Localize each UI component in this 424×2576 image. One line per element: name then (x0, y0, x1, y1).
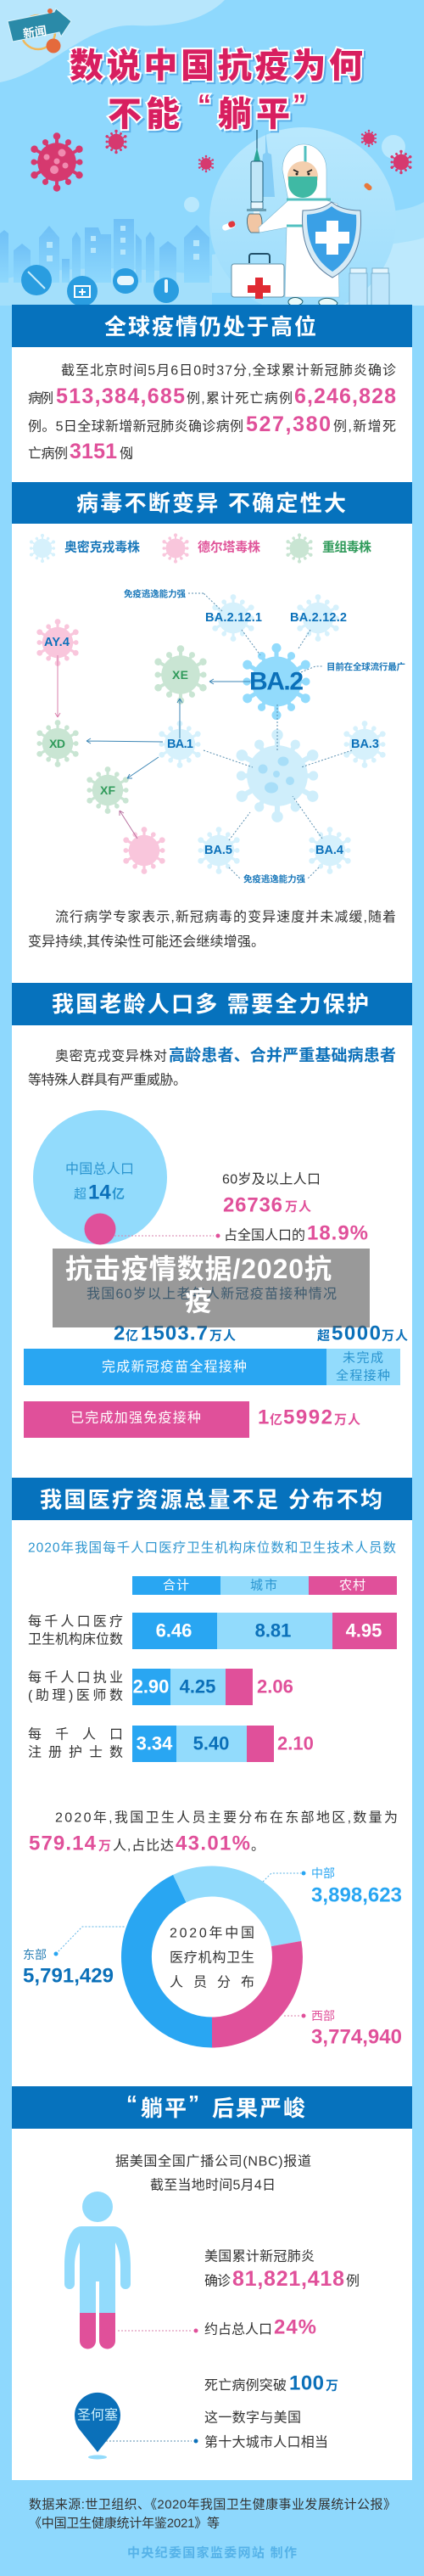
row: doctors: (助理)医师数 (28, 1687, 123, 1703)
section 5 heading: 后果严峻 (212, 2096, 305, 2121)
row: beds: 每千人口医疗 (28, 1614, 123, 1630)
text: personnel distribution (29, 1810, 398, 1855)
row: doctors (28, 1669, 293, 1705)
section 3 heading (12, 983, 412, 1025)
text: intro (28, 1046, 396, 1088)
bar: full vaccination: 全程接种 (336, 1368, 390, 1383)
text: personnel distribution: 43.01% (176, 1832, 250, 1855)
title: 不能 (108, 96, 180, 133)
row: beds (28, 1613, 397, 1649)
text: intro: 奥密克戎变异株对 (55, 1049, 167, 1064)
row: nurses: 5.40 (193, 1733, 229, 1754)
variant labels: BA.2 (249, 667, 304, 696)
chart: population circle: 中国总人口 (65, 1161, 134, 1176)
icon: map pin San Jose (75, 2393, 120, 2460)
overlay banner: 疫 (185, 1286, 212, 1316)
text: NBC intro: 截至当地时间5月4日 (150, 2178, 276, 2193)
title: 数说中国抗疫为何 (70, 48, 363, 85)
row: doctors: 4.25 (180, 1675, 215, 1698)
label: east: 东部 (23, 1948, 47, 1961)
legend (29, 533, 371, 564)
stat labels: vaccination: 1503.7 (141, 1322, 208, 1344)
stat: over 60: 60岁及以上人口 (222, 1171, 321, 1187)
panel: medical resources (12, 1520, 412, 2086)
text: personnel distribution: 2020年,我国卫生人员主要分布在东部地区,数量为 (55, 1810, 398, 1825)
stat: US cases (118, 2249, 360, 2339)
badge: news (8, 8, 71, 53)
syringe (247, 130, 266, 233)
donut centre label: 人员分布 (170, 1974, 254, 1990)
variant labels: BA.2.12.2 (290, 611, 347, 625)
bar: booster: 1 (258, 1406, 269, 1429)
row: doctors: 2.06 (257, 1675, 293, 1698)
variant labels: XF (100, 783, 115, 797)
text: global figures: 亡病例 (28, 446, 68, 462)
round icons (21, 265, 179, 306)
stat: US cases: 例 (346, 2273, 360, 2288)
stat: US deaths: 这一数字与美国 (204, 2410, 301, 2426)
row: doctors: 2.90 (133, 1675, 169, 1698)
label: west: 3,774,940 (311, 2025, 402, 2049)
row: nurses: 3.34 (137, 1733, 173, 1754)
stat: US deaths: 万 (326, 2378, 338, 2394)
section 4 heading (12, 1478, 412, 1520)
row: doctors: 每千人口执业 (28, 1670, 123, 1686)
text: mutation note: 流行病学专家表示,新冠病毒的变异速度并未减缓,随着 (55, 910, 396, 925)
stat: US deaths: 第十大城市人口相当 (204, 2434, 328, 2450)
table header: 城市 (250, 1579, 277, 1592)
stat: over 60 (114, 1171, 368, 1244)
text: NBC intro (115, 2154, 311, 2193)
bar: booster (24, 1401, 360, 1438)
row: beds: 4.95 (346, 1619, 382, 1642)
footer: sources (29, 2497, 396, 2531)
bar: booster: 亿 (270, 1412, 282, 1428)
stat labels: vaccination: 万人 (209, 1329, 236, 1343)
solid arrows (55, 655, 250, 839)
table header: 农村 (339, 1579, 365, 1592)
icon: map pin San Jose: 圣何塞 (77, 2407, 118, 2422)
variant labels: XD (49, 737, 65, 750)
text: global figures: 513,384,685 (56, 384, 185, 408)
donut centre label (170, 1925, 254, 1990)
row: nurses: 2.10 (277, 1733, 314, 1754)
chart: population circle: 亿 (112, 1187, 125, 1202)
label: central: 中部 (311, 1866, 335, 1880)
hero illustration (0, 0, 424, 314)
variant labels: 目前在全球流行最广 (326, 661, 405, 672)
bar: full vaccination: 未完成 (343, 1351, 383, 1365)
stat: US deaths: 死亡病例突破 (204, 2378, 287, 2394)
stat: US cases: 美国累计新冠肺炎 (204, 2249, 315, 2265)
text: intro: 等特殊人群具有严重威胁。 (28, 1073, 187, 1088)
icon: person (64, 2192, 131, 2349)
row: beds: 8.81 (255, 1619, 291, 1642)
stat labels: vaccination: 2 (114, 1322, 125, 1344)
row: beds: 6.46 (156, 1619, 192, 1642)
footer: sources: 数据来源:世卫组织、《2020年我国卫生健康事业发展统计公报》 (29, 2497, 396, 2512)
stat: US cases: 约占总人口 (204, 2322, 272, 2337)
tower (259, 132, 275, 197)
text: personnel distribution: 。 (251, 1838, 265, 1854)
stat: over 60: 18.9% (307, 1222, 368, 1244)
text: personnel distribution: 579.14 (29, 1832, 97, 1855)
section 2 heading (12, 482, 412, 524)
section 5 heading (12, 2086, 412, 2129)
badge: news: 新闻 (22, 24, 47, 41)
text: global figures: 例,累计死亡病例 (187, 390, 293, 406)
stat labels: vaccination: 亿 (126, 1329, 138, 1343)
variant labels: AY.4 (44, 636, 70, 649)
table header (132, 1576, 397, 1595)
stat: over 60: 26736 (223, 1193, 282, 1217)
stat: over 60: 占全国人口的 (224, 1227, 305, 1243)
panel: variants (12, 524, 412, 983)
title (70, 48, 363, 133)
text: global figures: 病例 (28, 390, 53, 406)
stat: US deaths: 100 (289, 2371, 324, 2395)
panel: consequences (12, 2129, 412, 2480)
row: nurses: 注册护士数 (28, 1745, 123, 1760)
section 3 heading: 我国老龄人口多 需要全力保护 (52, 991, 369, 1017)
chart title: 2020年我国每千人口医疗卫生机构床位数和卫生技术人员数 (28, 1540, 396, 1555)
text: global figures (28, 363, 396, 463)
variant labels (44, 588, 405, 884)
text: NBC intro: 据美国全国广播公司(NBC)报道 (115, 2154, 311, 2169)
row: beds: 卫生机构床位数 (28, 1631, 123, 1647)
chart heading: vaccination: 我国60岁以上老年人新冠疫苗接种情况 (86, 1287, 337, 1302)
label: west (284, 2009, 402, 2049)
variant labels: BA.1 (167, 738, 193, 751)
section 5 heading: “ (126, 2091, 137, 2116)
doctor (259, 144, 339, 307)
text: mutation note (28, 910, 396, 949)
stat labels: vaccination: 5000 (332, 1322, 381, 1344)
title: ” (293, 89, 306, 120)
legend: 奥密克戎毒株 (64, 540, 140, 555)
label: central: 3,898,623 (311, 1884, 402, 1906)
stat labels: vaccination: 万人 (382, 1329, 408, 1343)
title: “ (198, 89, 211, 120)
chart: population circle: 超 (74, 1187, 86, 1202)
stat: US cases: 确诊 (204, 2273, 231, 2288)
shield (303, 202, 361, 278)
legend: 德尔塔毒株 (198, 540, 260, 555)
label: west: 西部 (311, 2009, 335, 2023)
variant labels: XE (172, 668, 188, 682)
stat: US deaths (106, 2371, 338, 2450)
stat labels: vaccination (114, 1322, 408, 1344)
bar: full vaccination (24, 1349, 400, 1385)
stat labels: vaccination: 超 (317, 1327, 330, 1343)
variant labels: BA.2.12.1 (205, 611, 262, 625)
row: nurses: 每千人口 (28, 1726, 123, 1742)
text: global figures: 3151 (70, 440, 117, 463)
text: intro: 高龄患者、合并严重基础病患者 (169, 1046, 396, 1064)
overlay banner: 抗击疫情数据/2020抗 (65, 1254, 332, 1284)
row: nurses (28, 1726, 314, 1762)
label: east (23, 1927, 126, 1988)
text: mutation note: 变异持续,其传染性可能还会继续增强。 (28, 934, 265, 949)
section 1 heading: 全球疫情仍处于高位 (104, 314, 316, 340)
big bubble behind doctor (209, 127, 396, 314)
capsules (221, 182, 373, 232)
donut centre label: 医疗机构卫生 (170, 1950, 254, 1966)
text: global figures: 527,380 (246, 412, 331, 436)
stat: US cases: 81,821,418 (232, 2267, 344, 2291)
chart: population circle (33, 1110, 167, 1244)
text: global figures: 例,新增死 (333, 419, 396, 435)
text: global figures: 6,246,828 (294, 384, 396, 408)
legend: 重组毒株 (322, 540, 371, 555)
section 5 heading: 躺平 (141, 2096, 187, 2121)
text: global figures: 例。5日全球新增新冠肺炎确诊病例 (28, 419, 243, 435)
city skyline (0, 219, 209, 283)
variant viruses (36, 594, 387, 874)
panel: elderly population (12, 1025, 412, 1478)
panel: global situation (12, 347, 412, 482)
stat: over 60: 万人 (285, 1200, 311, 1214)
medkit (232, 254, 284, 299)
variant labels: BA.3 (351, 738, 379, 751)
text: personnel distribution: 人,占比达 (113, 1838, 174, 1854)
bar: booster: 万人 (334, 1412, 360, 1428)
chart: population circle: 14 (88, 1181, 111, 1204)
text: global figures: 例。 (120, 446, 140, 462)
donut centre label: 2020年中国 (170, 1925, 254, 1940)
vials (349, 268, 389, 306)
section 2 heading: 病毒不断变异 不确定性大 (76, 491, 346, 516)
label: central (263, 1866, 402, 1906)
footer: sources: 《中国卫生健康统计年鉴2021》等 (29, 2516, 220, 2531)
overlay banner (53, 1249, 370, 1327)
variant labels: 免疫逃逸能力强 (124, 588, 187, 599)
text: global figures: 截至北京时间5月6日0时37分,全球累计新冠肺炎确诊 (61, 363, 396, 379)
footer: credit: 中央纪委国家监委网站 制作 (127, 2545, 297, 2560)
dashed links (188, 593, 352, 878)
section 5 heading: ” (188, 2091, 199, 2116)
bar: booster: 5992 (283, 1406, 332, 1429)
stat: US cases: 24% (274, 2315, 316, 2339)
variant labels: BA.4 (315, 844, 343, 857)
text: personnel distribution: 万 (98, 1838, 111, 1854)
section 4 heading: 我国医疗资源总量不足 分布不均 (40, 1487, 382, 1512)
variant labels: 免疫逃逸能力强 (243, 873, 305, 884)
bar: full vaccination: 完成新冠疫苗全程接种 (102, 1360, 247, 1375)
city windows (47, 226, 199, 261)
background waves (0, 0, 424, 306)
variant labels: BA.5 (204, 844, 232, 857)
pale bubbles (184, 135, 405, 212)
section 1 heading (12, 305, 412, 347)
label: east: 5,791,429 (23, 1964, 114, 1988)
title: 躺平 (218, 96, 290, 133)
bar: booster: 已完成加强免疫接种 (70, 1411, 201, 1426)
red virus icons (30, 130, 412, 192)
table header: 合计 (163, 1579, 189, 1592)
donut chart (137, 1882, 287, 2032)
